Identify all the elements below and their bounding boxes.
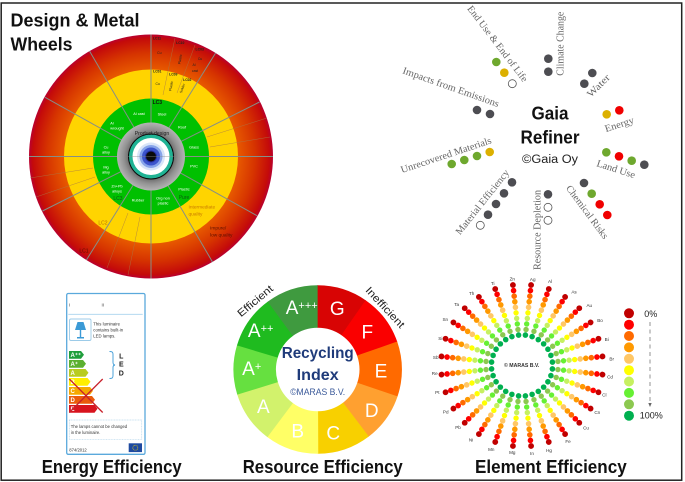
- element labels: Au: [586, 303, 593, 308]
- heading: Energy Efficiency: Energy Efficiency: [42, 456, 182, 477]
- label outline: [67, 294, 145, 454]
- element labels: Pb: [455, 425, 461, 430]
- labels: top sector: LC11: [153, 36, 161, 40]
- box: lamps note: [69, 420, 142, 439]
- labels: pure sector: Steel: [158, 112, 166, 116]
- labels: top sector: Solder: [179, 82, 186, 94]
- text: LED: [119, 354, 124, 378]
- chart: element efficiency dots: [432, 276, 614, 456]
- element labels: Ag: [530, 277, 536, 282]
- icon: EU flag: [129, 443, 142, 452]
- element labels: Cd: [607, 374, 613, 380]
- element labels: Mn: [488, 447, 495, 452]
- element labels: Hg: [546, 448, 552, 453]
- element labels: Cu: [583, 426, 589, 430]
- chart: recycling index ring: [229, 281, 407, 458]
- spokes: [29, 34, 273, 278]
- label: intermediate quality: quality: [188, 212, 203, 218]
- element labels: Th: [469, 291, 475, 296]
- segment letters: B: [291, 422, 304, 442]
- spoke: Energy: Energy: [604, 115, 636, 135]
- segment letters: +++: [298, 300, 318, 312]
- heading: Design & Metal Wheels: Wheels: [10, 34, 72, 54]
- spoke: Land Use: Land Use: [595, 158, 637, 181]
- element labels: Si: [438, 336, 442, 341]
- segment letters: A: [242, 359, 255, 380]
- energy class arrows: [69, 351, 98, 413]
- labels: pure sector: Cu: [104, 146, 108, 150]
- label: LC2: LC2: [98, 220, 108, 226]
- text: luminaire note: This luminaire: [93, 322, 121, 326]
- labels: top sector: Al: [192, 63, 196, 67]
- segment letters: A: [248, 321, 261, 342]
- segment letters: F: [361, 322, 373, 344]
- spoke: Climate Change: [544, 11, 566, 76]
- labels: top sector: Plastic: [168, 80, 174, 91]
- element labels: Cl: [602, 392, 606, 398]
- labels: pure sector: Zn+Pb: [111, 184, 123, 188]
- element labels: Re: [432, 371, 438, 376]
- labels: top sector: [153, 36, 204, 94]
- panel: energy label: [67, 294, 145, 454]
- element labels: Sb: [433, 355, 439, 360]
- labels: pure sector: Mg: [103, 166, 109, 170]
- element labels: [432, 276, 614, 456]
- label: inefficient: Inefficient: [363, 285, 407, 331]
- icon: lamp: [70, 319, 91, 340]
- element labels: Cn: [594, 410, 601, 415]
- labels: pure sector: Plastic: [178, 188, 190, 192]
- energy class arrows: C: [70, 389, 76, 395]
- element labels: In: [530, 451, 534, 456]
- spoke: Water: Water: [585, 72, 613, 100]
- spoke: Impacts from Emissions: Impacts from Emissions: [401, 66, 501, 110]
- labels: top sector: Cu: [198, 57, 202, 61]
- labels: pure sector: Roof: [178, 126, 187, 130]
- ring: intermediate quality: [64, 70, 238, 244]
- centre credit: © MARAS B.V.: [504, 362, 540, 369]
- legend: recovery scale: [624, 308, 663, 421]
- label: efficient: Efficient: [235, 283, 276, 320]
- labels: top sector: LC09: [169, 72, 178, 76]
- heading: Design & Metal Wheels: [10, 10, 140, 54]
- centre: recycling index: [282, 345, 354, 397]
- labels: pure sector: Al: [110, 122, 114, 126]
- labels: top sector: cast: [192, 69, 198, 73]
- segment letters: +: [255, 361, 261, 373]
- ring: pure: [93, 98, 209, 214]
- centre title: Gaia Refiner: Gaia: [532, 102, 569, 124]
- labels: top sector: Cu: [156, 82, 160, 86]
- energy class arrows: D: [70, 398, 76, 404]
- heading: Element Efficiency: Element Efficiency: [475, 456, 627, 477]
- element labels: Sn: [442, 317, 449, 322]
- spoke: Energy: [602, 106, 636, 135]
- label: intermediate quality: [188, 204, 215, 218]
- segment letters: A: [257, 397, 270, 418]
- label: product design: Product design: [135, 131, 169, 137]
- segment letters: C: [326, 424, 340, 444]
- labels: pure sector: Pure: [179, 195, 189, 201]
- segment letters: A: [286, 298, 298, 319]
- element labels: Ti: [491, 281, 495, 286]
- spoke: Resource Depletion: Resource Depletion: [533, 190, 544, 270]
- element labels: Mg: [509, 450, 516, 455]
- heading: Design & Metal Wheels: Design & Metal: [10, 10, 140, 30]
- spoke: Water: [580, 69, 613, 100]
- labels: pure sector: Org non: [156, 196, 170, 200]
- legend: recovery scale: 0%: [644, 309, 657, 319]
- element labels: Bi: [605, 337, 609, 342]
- thin sub-sector lines: [30, 38, 270, 275]
- labels: pure sector: LC3: [153, 100, 162, 106]
- regulation number: 874/2012: [69, 448, 87, 452]
- segment letters: ++: [261, 323, 273, 335]
- header marks: [69, 302, 104, 308]
- header marks: II: [102, 302, 104, 308]
- labels: top sector: Cu: [157, 51, 162, 55]
- element labels: Ta: [454, 302, 460, 307]
- segment letters: G: [330, 299, 345, 320]
- element labels: Fe: [565, 439, 571, 444]
- red cross: [69, 379, 103, 412]
- element labels: Pt: [435, 390, 440, 395]
- heading: Resource Efficiency: Resource Efficiency: [243, 456, 403, 477]
- label: intermediate quality: Intermediate: [188, 204, 215, 210]
- energy class arrows: B: [70, 380, 76, 386]
- labels: pure sector: LC3: [113, 196, 123, 202]
- element labels: Zn: [510, 276, 515, 282]
- spoke: Land Use: [595, 148, 649, 181]
- legend: recovery scale: 100%: [640, 410, 663, 420]
- energy class arrows: E: [70, 407, 75, 413]
- box: lamps note: The lamps cannot be changed: [71, 424, 128, 429]
- labels: top sector: LC01: [153, 70, 162, 74]
- centre: recycling index: ©MARAS B.V.: [290, 387, 345, 397]
- spoke: Material Efficiency: Material Efficiency: [454, 168, 512, 237]
- labels: top sector: LC03: [196, 48, 204, 52]
- labels: pure sector: wrought: [110, 126, 125, 130]
- labels: top sector: LC02: [183, 78, 192, 82]
- labels: pure sector: plastic: [158, 202, 168, 206]
- ring: low quality: [29, 34, 273, 278]
- element labels: Bo: [597, 318, 603, 323]
- labels: pure sector: alloys: [112, 190, 122, 194]
- dot rays: [438, 282, 606, 449]
- labels: pure sector: Glass: [189, 146, 199, 150]
- spoke: Unrecovered Materials: Unrecovered Materials: [399, 136, 493, 176]
- chart: Gaia Refiner radial indicators: [399, 4, 649, 270]
- labels: pure sector: Rubber: [132, 198, 145, 202]
- segment letters: E: [375, 362, 387, 382]
- element labels: Al: [548, 279, 552, 284]
- header marks: I: [69, 302, 70, 308]
- bracket: [110, 352, 115, 378]
- centre title: Gaia Refiner: Refiner: [520, 126, 580, 148]
- label: LC1: LC1: [79, 248, 89, 254]
- spoke: Resource Depletion: [533, 190, 552, 270]
- text: LED: D: [119, 370, 124, 378]
- labels: pure sector: alloy: [102, 170, 110, 174]
- centre: recycling index: Index: [297, 367, 339, 384]
- text: LED: L: [119, 354, 124, 360]
- element labels: Br: [609, 356, 614, 362]
- centre title: Gaia Refiner: [520, 102, 580, 166]
- label: impure low quality: Impure/: [210, 226, 227, 232]
- energy class arrows: A⁺⁺: [70, 352, 81, 359]
- spoke: Climate Change: Climate Change: [555, 11, 566, 76]
- labels: top sector: Plastic: [177, 54, 183, 65]
- centre: recycling index: Recycling: [282, 345, 354, 362]
- labels: pure sector: Al cast: [133, 112, 146, 116]
- labels: pure sector: PVC: [190, 164, 198, 168]
- spoke: End Use & End of Life: End Use & End of Life: [465, 4, 530, 85]
- centre disc: product design: [117, 122, 185, 190]
- segment letters: [242, 298, 387, 444]
- spoke: Chemical Risks: Chemical Risks: [563, 183, 610, 242]
- text: luminaire note: contains built-in: [93, 328, 124, 332]
- text: LED: E: [119, 362, 124, 368]
- labels: pure sector: alloy: [102, 150, 110, 154]
- energy class arrows: A⁺: [70, 361, 78, 368]
- energy class arrows: A: [70, 371, 76, 377]
- centre title: Gaia Refiner: ©Gaia Oy: [522, 154, 578, 166]
- labels: pure sector: [102, 100, 199, 206]
- ring segments: [229, 281, 406, 458]
- text: luminaire note: [93, 322, 124, 338]
- element labels: Pd: [443, 410, 449, 414]
- element labels: As: [571, 290, 577, 294]
- chart: metal wheel: [29, 34, 273, 278]
- element labels: Ni: [469, 438, 473, 442]
- label: impure low quality: [210, 226, 233, 238]
- labels: top sector: LC10: [176, 41, 185, 45]
- box: lamps note: in the luminaire.: [71, 430, 100, 435]
- segment letters: D: [365, 401, 379, 422]
- label: impure low quality: low quality: [210, 232, 233, 238]
- text: luminaire note: LED lamps.: [93, 333, 116, 338]
